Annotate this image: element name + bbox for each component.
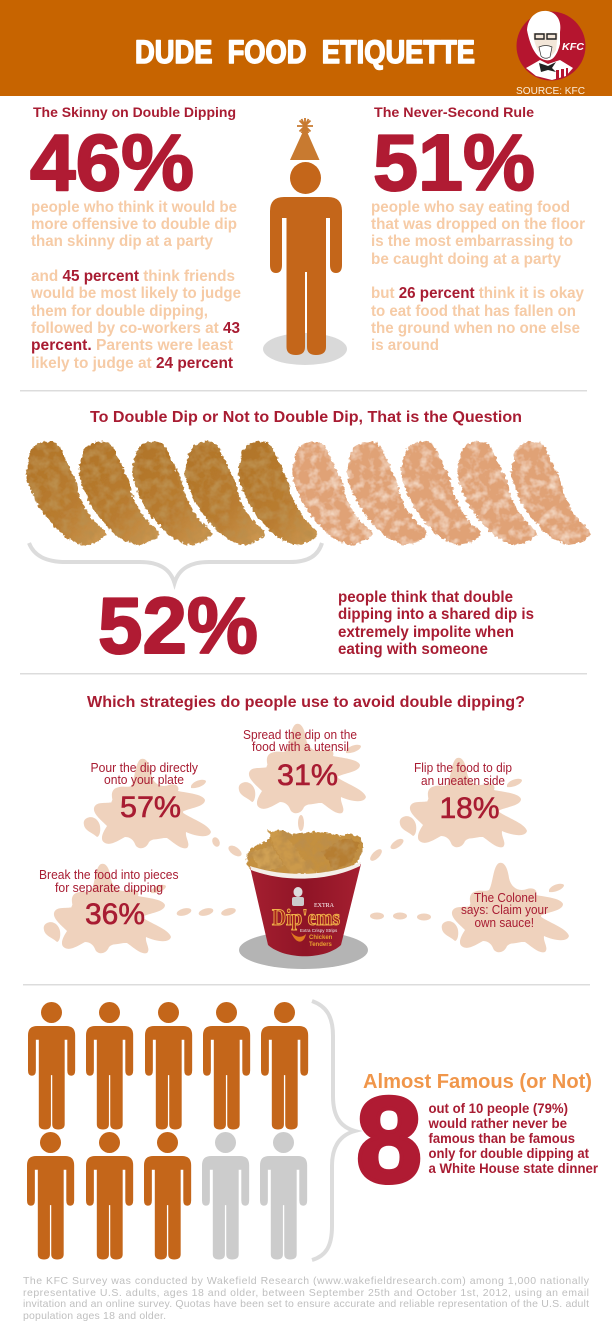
stat description [338,589,534,658]
okay text: but 26 percent think it is okay [371,285,584,302]
bucket of chicken: Chicken [309,935,333,941]
okay text: the ground when no one else [371,320,580,337]
bucket of chicken: Dip'ems [272,905,340,930]
judging text: percent. Parents were least [31,337,233,354]
panel: double dip question [26,409,591,670]
bucket of chicken: EXTRA [314,903,335,909]
brace [29,543,322,583]
panel: strategies [39,694,569,969]
heading: Which strategies do people use to avoid double dipping? [87,694,525,711]
big stat 52%: 52% [98,581,258,670]
stat description: that was dropped on the floor [371,216,585,233]
heading: Almost Famous (or Not) [363,1071,592,1093]
splat: pour 57%: onto your plate [104,773,184,787]
heading: The Skinny on Double Dipping [33,104,236,120]
judging text: likely to judge at 24 percent [31,355,233,372]
footnote: invitation and an online survey. Quotas have been set to ensure accurate and reliable representation of the U.S. adult [23,1298,589,1310]
judging text: followed by co-workers at 43 [31,320,240,337]
bucket of chicken [239,830,368,969]
footnote: The KFC Survey was conducted by Wakefield Research (www.wakefieldresearch.com) among 1,000 nationally [23,1275,590,1287]
big stat 46%: 46% [30,118,194,207]
okay text [371,285,584,354]
stat description: than skinny dip at a party [31,233,213,250]
pictogram: 8 of 10 people [27,1002,308,1259]
panel: never-second rule [371,104,585,354]
source label: SOURCE: KFC [516,86,585,97]
description: only for double dipping at [428,1145,589,1161]
splat: break 36%: Break the food into pieces [39,868,178,882]
stat description: is the most embarrassing to [371,233,573,250]
stat description: people who think it would be [31,199,237,216]
stat description: eating with someone [338,641,488,658]
splat: pour 57%: 57% [120,791,181,824]
judging text [30,268,241,372]
footnote [23,1275,590,1322]
footnote: population ages 18 and older. [23,1310,166,1322]
brace [312,1001,355,1260]
header banner [0,0,612,97]
title: DUDE FOOD ETIQUETTE [135,34,475,70]
heading: The Never-Second Rule [374,104,534,120]
judging text: would be most likely to judge [30,285,241,302]
bucket of chicken: Extra Crispy Strips [300,928,338,933]
big number 8: 8 [356,1072,422,1208]
splat: flip 18%: 18% [440,792,500,825]
description: a White House state dinner [428,1160,599,1176]
splat: flip 18%: an uneaten side [421,774,505,788]
splat: spread 31% [239,724,366,813]
judging text: and 45 percent think friends [31,268,235,285]
description: famous than be famous [428,1130,575,1146]
splat: flip 18% [400,758,527,847]
splat: flip 18%: Flip the food to dip [414,761,512,775]
splat: colonel says [442,863,569,952]
bucket of chicken: Tenders [309,942,333,948]
splat: spread 31%: 31% [277,759,338,792]
panel: skinny on double dipping [30,104,241,372]
splat: colonel says: says: Claim your [461,903,548,917]
splat: pour 57%: Pour the dip directly [90,761,199,775]
heading: To Double Dip or Not to Double Dip, That is the Question [90,409,522,426]
figure: person with party hat [263,118,347,365]
stat description: more offensive to double dip [31,216,237,233]
splat: break 36% [39,864,178,953]
stat description [31,199,237,250]
description: would rather never be [428,1115,567,1131]
stat description [371,199,585,268]
panel: almost famous [27,1001,599,1260]
splat: break 36%: for separate dipping [55,881,163,895]
big stat 51%: 51% [373,118,535,207]
stat description: dipping into a shared dip is [338,606,534,623]
stat description: extremely impolite when [338,624,514,641]
description: out of 10 people (79%) [428,1100,568,1116]
stat description: be caught doing at a party [371,251,561,268]
description [428,1100,599,1176]
connecting drops [176,815,431,920]
splat: pour 57% [84,759,211,848]
icon: KFC colonel logo: KFC [562,41,584,53]
stat description: people think that double [338,589,513,606]
okay text: is around [371,337,439,354]
okay text: to eat food that has fallen on [371,303,576,320]
chicken tenders pictogram: 5 of 10 [26,442,591,545]
stat description: people who say eating food [371,199,570,216]
splat: colonel says: The Colonel [474,891,537,905]
splat: spread 31%: Spread the dip on the [243,728,357,742]
judging text: them for double dipping, [31,303,208,320]
icon: KFC colonel logo [516,11,586,80]
splat: spread 31%: food with a utensil [252,740,349,754]
footnote: representative U.S. adults, ages 18 and older, between September 25th and October 1st, 2012, using an email [23,1287,589,1299]
splat: break 36%: 36% [85,898,145,931]
icon: party hat [290,118,320,160]
splat: colonel says: own sauce! [474,916,534,930]
